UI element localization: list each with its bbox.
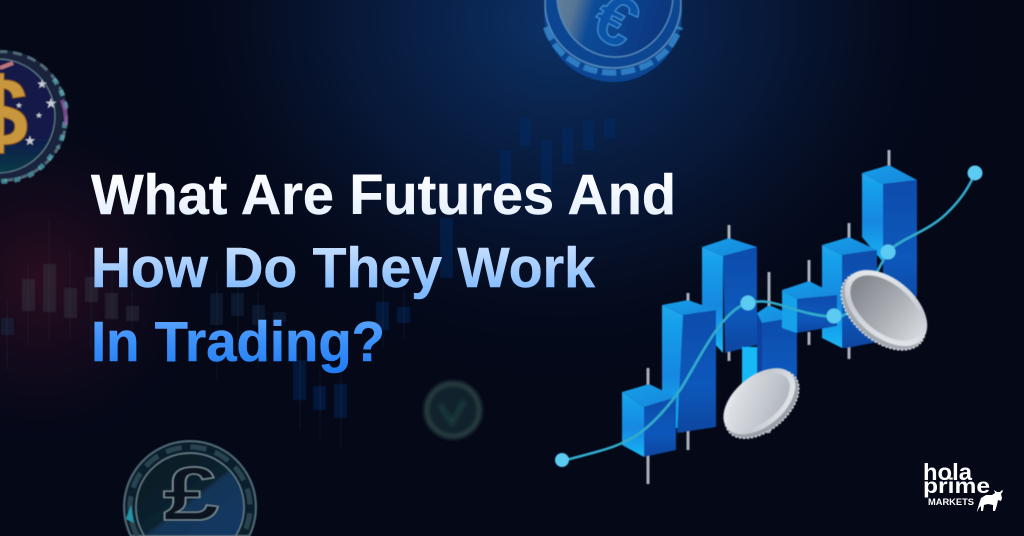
logo wordmark: markets: MARKETS [928,497,974,507]
coin: pound [124,441,256,536]
title: How Do They Work [91,236,595,300]
coin: Australian dollar [0,50,68,182]
southern cross stars: ★ [37,77,47,91]
southern cross stars [15,77,57,149]
candle 3 [702,225,757,361]
icon: bull [977,490,1003,512]
logo wordmark: hola: hola [923,459,972,485]
faded background candlesticks [1,118,615,450]
logo wordmark: prime: prime [923,475,990,498]
candle 6 [822,223,877,359]
trend line [562,173,975,461]
candle 5 [782,260,837,345]
pound sign: £ [163,452,219,536]
southern cross stars: ★ [15,101,23,110]
silver coin: upper [827,254,942,366]
title: What Are Futures And [91,163,676,227]
southern cross stars: ★ [24,134,36,149]
candle 1 [622,368,676,484]
candle 2 [662,293,716,450]
southern cross stars: ★ [35,111,43,120]
blurred distant coin [426,383,480,437]
candle 4 [742,272,797,433]
coin: euro [544,0,682,82]
3D candlestick chart [555,150,982,484]
title: In Trading? [91,310,385,374]
southern cross stars: ★ [45,96,57,112]
trend line nodes [555,166,982,467]
title [91,163,676,374]
silver coin: lower [710,354,812,452]
logo [923,459,1003,512]
candle 7 [862,150,917,310]
